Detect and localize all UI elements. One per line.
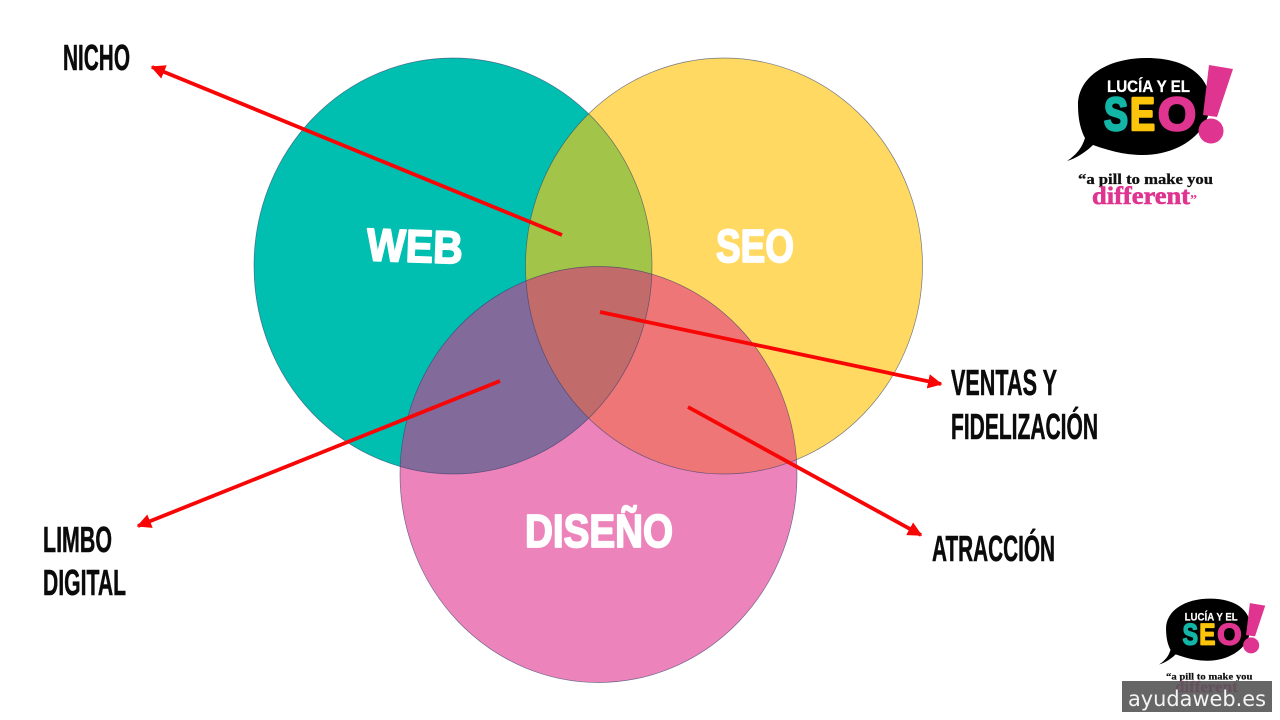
arrow: to limbo digital — [138, 381, 500, 526]
logo SEO: O — [1158, 88, 1196, 140]
logo different: different — [1092, 183, 1191, 210]
circle: diseño — [400, 266, 797, 682]
label: ventas y fidelización: FIDELIZACIÓN — [951, 405, 1098, 447]
label: DISEÑO: DISEÑO — [525, 505, 673, 557]
logo SEO: S — [1104, 88, 1128, 140]
overlap: web and diseño — [400, 281, 588, 474]
arrow: to ventas y fidelización — [600, 312, 941, 384]
label: limbo digital: DIGITAL — [43, 562, 126, 603]
logo: bottom right — [1159, 599, 1265, 696]
logo text: LUCÍA Y EL — [1107, 77, 1190, 96]
label: WEB: WEB — [366, 218, 464, 274]
logo bubble — [1067, 58, 1210, 161]
arrow: to atracción — [688, 407, 921, 535]
overlap: center — [526, 266, 652, 418]
circle outlines — [254, 58, 922, 682]
venn diagram — [254, 58, 922, 682]
logo tagline: “a pill to make you — [1078, 172, 1213, 188]
logo exclamation — [1198, 65, 1233, 144]
small logo text: LUCÍA Y EL — [1185, 610, 1238, 623]
label: limbo digital — [43, 519, 126, 603]
overlap: seo and diseño — [526, 274, 796, 474]
small logo bubble — [1159, 599, 1251, 665]
small logo different: different — [1175, 679, 1238, 696]
small logo SEO — [1183, 619, 1242, 652]
circle: seo — [526, 58, 922, 474]
label: ventas y fidelización: VENTAS Y — [951, 362, 1057, 403]
logo SEO — [1104, 88, 1196, 140]
small logo SEO: O — [1217, 619, 1242, 652]
watermark: ayudaweb.es — [1128, 687, 1266, 711]
logo closing quote: ” — [1190, 193, 1197, 208]
small logo tagline: “a pill to make you — [1166, 672, 1252, 682]
label: limbo digital: LIMBO — [43, 519, 112, 560]
small logo exclamation — [1243, 603, 1265, 653]
label: ventas y fidelización — [951, 362, 1098, 447]
logo SEO: E — [1130, 88, 1155, 140]
small logo SEO: S — [1183, 619, 1198, 652]
small logo SEO: E — [1199, 619, 1215, 652]
label: atracción: ATRACCIÓN — [932, 527, 1055, 569]
overlap: web and seo — [526, 114, 652, 280]
arrow: to nicho — [152, 67, 562, 235]
logo: top right — [1067, 58, 1233, 210]
label: SEO: SEO — [716, 220, 794, 272]
label: nicho: NICHO — [63, 37, 130, 78]
circle: web — [254, 58, 652, 474]
